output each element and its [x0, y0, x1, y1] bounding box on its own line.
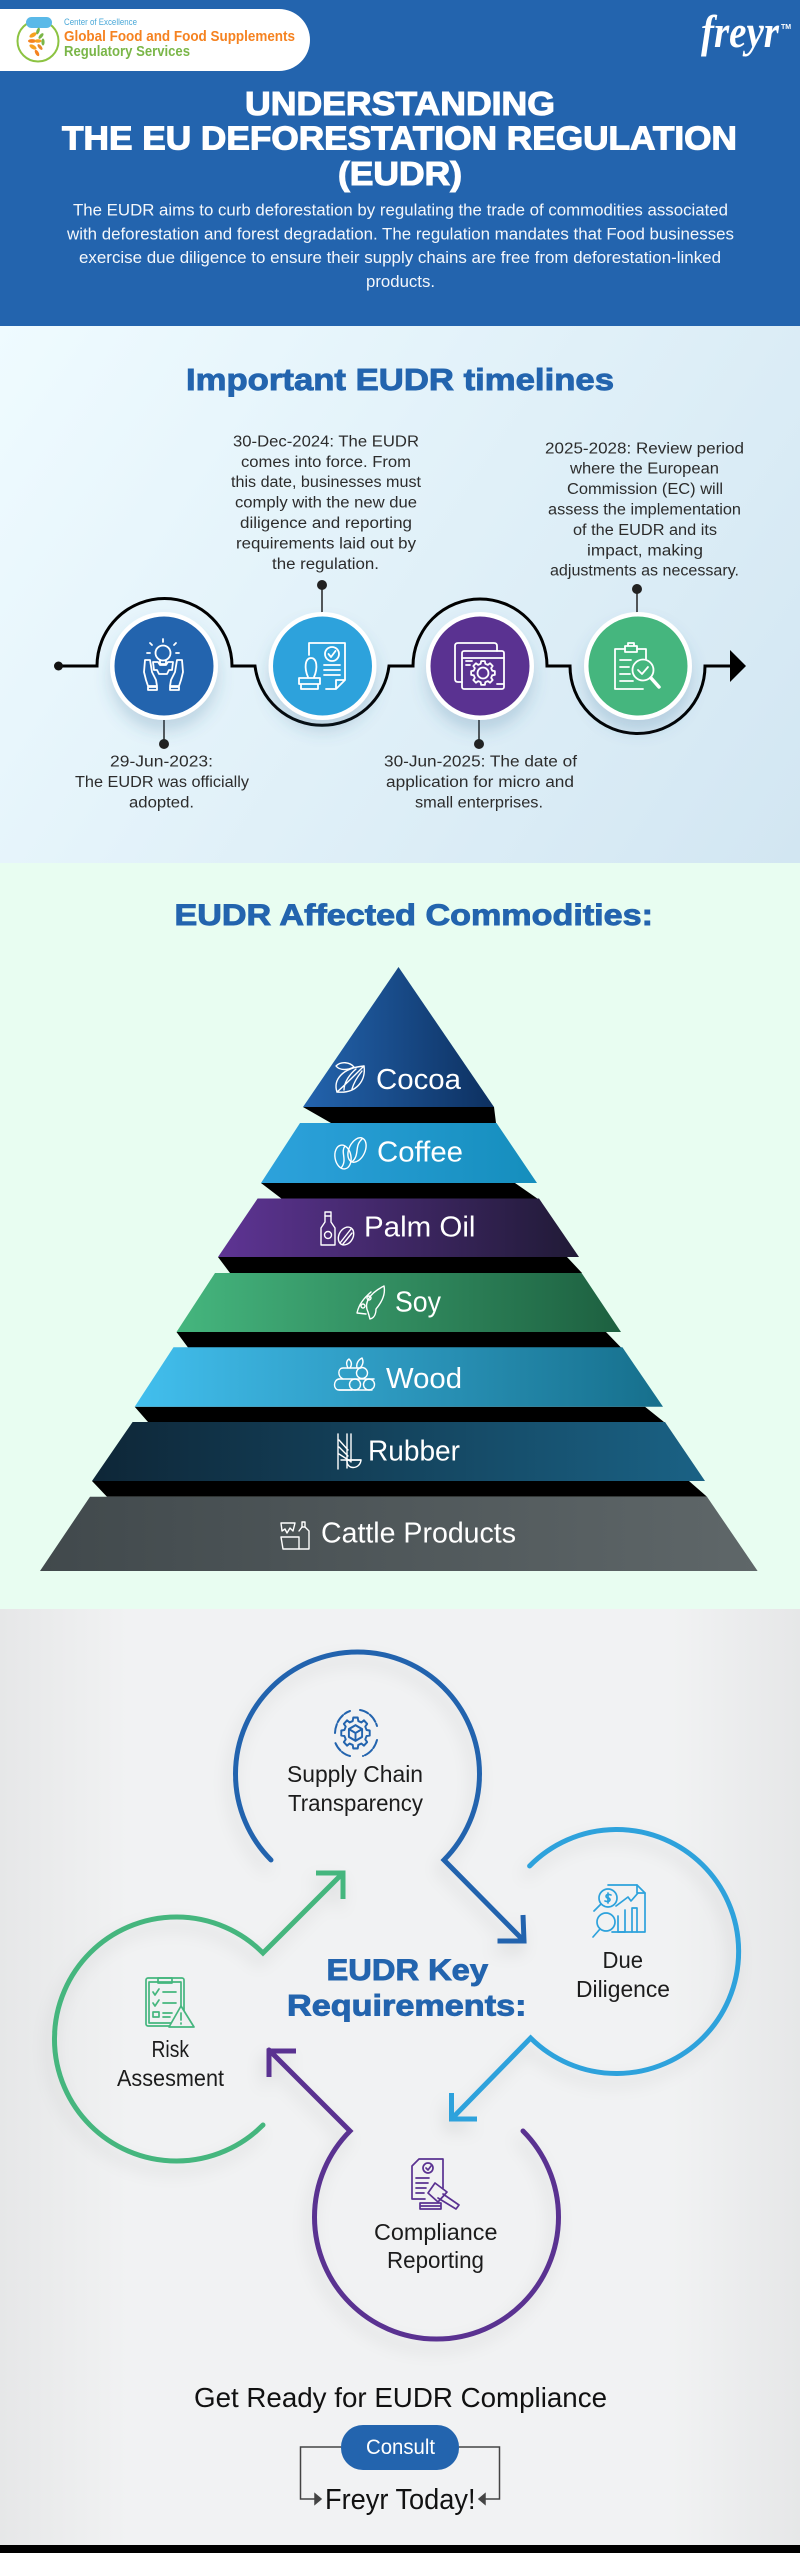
requirement: risk assessment — [54, 1873, 343, 2161]
label: risk assesment: Assesment — [117, 2065, 224, 2091]
title: UNDERSTANDING — [245, 85, 555, 122]
layer: cattle products: Cattle Products — [321, 1518, 516, 1550]
icon: stamp and document — [299, 643, 345, 689]
label: risk assesment: Risk — [152, 2036, 189, 2062]
pyramid — [40, 967, 758, 1571]
label: due diligence: Due — [602, 1947, 643, 1973]
timeline arrowhead — [730, 650, 746, 682]
cta heading: Get Ready for EUDR Compliance — [194, 2382, 607, 2413]
text: milestone 2: the regulation. — [272, 556, 379, 573]
cta closing: Freyr Today! — [325, 2484, 476, 2516]
timeline start dot — [54, 662, 63, 670]
layer: rubber — [92, 1422, 705, 1481]
text: milestone 3: 30-Jun-2025: The date of — [384, 754, 578, 771]
layer: cocoa — [303, 967, 494, 1107]
heading: commodities: EUDR Affected Commodities: — [174, 899, 653, 932]
text: milestone 3 — [384, 754, 578, 811]
icon: cocoa pod — [336, 1063, 364, 1092]
title — [62, 85, 737, 192]
text: milestone 4 — [545, 440, 744, 580]
text: milestone 2: diligence and reporting — [240, 515, 412, 532]
icon: checklist and warning — [146, 1978, 194, 2027]
icon: bulb, gear and hands — [144, 639, 183, 690]
requirement: supply chain transparency — [235, 1652, 524, 1941]
layer: wood — [135, 1347, 663, 1407]
milestone 4: 2025-2028 — [545, 440, 744, 720]
intro paragraph: with deforestation and forest degradation. The regulation mandates that Food businesses — [66, 224, 734, 243]
layer shadows — [92, 1107, 707, 1497]
heading: key requirements — [287, 1954, 526, 2023]
layer: rubber: Rubber — [368, 1436, 460, 1468]
layer: palm oil: Palm Oil — [364, 1212, 476, 1244]
label: due diligence — [576, 1947, 670, 2002]
milestone 2: 30-Dec-2024 — [231, 433, 422, 720]
title: (EUDR) — [338, 155, 462, 192]
purple ring and arrow — [269, 2050, 558, 2339]
freyr logo: TM — [781, 24, 791, 31]
label: supply chain transparency: Supply Chain — [287, 1761, 423, 1787]
layer: wood: Wood — [386, 1363, 462, 1395]
icon: oil bottle and palm nut — [321, 1212, 357, 1248]
blue ring and arrow — [235, 1652, 524, 1941]
text: milestone 2: 30-Dec-2024: The EUDR — [233, 433, 419, 450]
text: milestone 1: The EUDR was officially — [75, 774, 249, 791]
icon: milk bottle and butter — [281, 1522, 309, 1549]
intro paragraph: products. — [366, 272, 435, 291]
text: milestone 4: of the EUDR and its — [573, 522, 717, 539]
label: due diligence: Diligence — [576, 1976, 670, 2002]
consult button — [341, 2425, 459, 2470]
text: milestone 2: comes into force. From — [241, 454, 411, 471]
title: THE EU DEFORESTATION REGULATION — [62, 120, 737, 156]
layer: coffee — [261, 1123, 537, 1183]
text: milestone 1: adopted. — [129, 794, 194, 811]
icon: soy pods — [357, 1286, 384, 1319]
panel: commodities — [0, 863, 800, 1609]
text: milestone 4: adjustments as necessary. — [550, 563, 739, 580]
text: milestone 4: where the European — [569, 461, 719, 478]
cyan ring and arrow — [452, 1829, 739, 2119]
text: milestone 4: impact, making — [587, 542, 703, 559]
intro paragraph — [66, 200, 734, 291]
green ring and arrow — [54, 1873, 343, 2161]
call to action — [194, 2382, 607, 2516]
text: milestone 4: 2025-2028: Review period — [545, 440, 744, 457]
logo text: Center of Excellence — [64, 17, 137, 28]
panel: header — [0, 0, 800, 326]
intro paragraph: The EUDR aims to curb deforestation by regulating the trade of commodities associated — [73, 200, 728, 220]
label: supply chain transparency — [287, 1761, 423, 1816]
requirement: due diligence — [452, 1829, 739, 2119]
label: compliance reporting: Compliance — [374, 2219, 498, 2245]
text: milestone 2: this date, businesses must — [231, 474, 422, 491]
milestone 1: 29-Jun-2023 — [75, 612, 249, 811]
text: milestone 4: Commission (EC) will — [567, 481, 723, 498]
text: milestone 2: comply with the new due — [235, 495, 417, 512]
icon: coffee beans — [333, 1135, 370, 1170]
layer: soy — [176, 1273, 621, 1332]
text: milestone 1: 29-Jun-2023: — [110, 754, 213, 771]
text: milestone 2: requirements laid out by — [236, 535, 416, 552]
layer: palm oil — [218, 1198, 579, 1257]
consult button: Consult — [366, 2436, 435, 2459]
logo pill: center of excellence: Global Food and Food Supplements — [64, 28, 295, 45]
icon: clipboard and magnifier — [615, 643, 659, 689]
panel: key requirements — [0, 1609, 800, 2545]
intro paragraph: exercise due diligence to ensure their supply chains are free from deforestation-linked — [79, 248, 721, 267]
layer: coffee: Coffee — [377, 1137, 463, 1169]
milestone 3: 30-Jun-2025 — [384, 612, 578, 811]
label: supply chain transparency: Transparency — [288, 1790, 423, 1816]
icon: windows and gear — [455, 643, 504, 689]
layer: cocoa: Cocoa — [376, 1064, 462, 1096]
logo mark — [18, 17, 58, 62]
text: milestone 3: application for micro and — [386, 774, 574, 791]
layer: soy: Soy — [395, 1287, 441, 1319]
layer: cattle products — [40, 1497, 758, 1571]
heading: key requirements: Requirements: — [287, 1990, 526, 2023]
label: compliance reporting — [374, 2219, 498, 2273]
logo pill: center of excellence — [0, 9, 310, 71]
icon: rubber tapping — [338, 1434, 361, 1469]
footer bar — [0, 2545, 800, 2553]
text: milestone 4: assess the implementation — [548, 502, 741, 518]
label: compliance reporting: Reporting — [387, 2247, 484, 2273]
icon: document and gavel — [412, 2159, 459, 2209]
heading: timelines: Important EUDR timelines — [186, 362, 614, 397]
label: risk assesment — [117, 2036, 224, 2091]
icon: gear with cube — [335, 1710, 377, 1756]
heading: key requirements: EUDR Key — [326, 1954, 488, 1987]
text: milestone 3: small enterprises. — [415, 794, 543, 811]
logo pill: center of excellence: Regulatory Services — [64, 43, 190, 60]
icon: wood logs — [334, 1358, 374, 1390]
requirement: compliance reporting — [269, 2050, 558, 2339]
panel: timelines — [0, 326, 800, 863]
timeline wave line — [58, 598, 732, 734]
icon: magnifier, dollar and chart — [593, 1885, 645, 1937]
freyr logo: freyr — [701, 6, 780, 57]
text: milestone 2 — [231, 433, 422, 573]
cta connectors — [300, 2447, 500, 2504]
text: milestone 1 — [75, 754, 249, 811]
